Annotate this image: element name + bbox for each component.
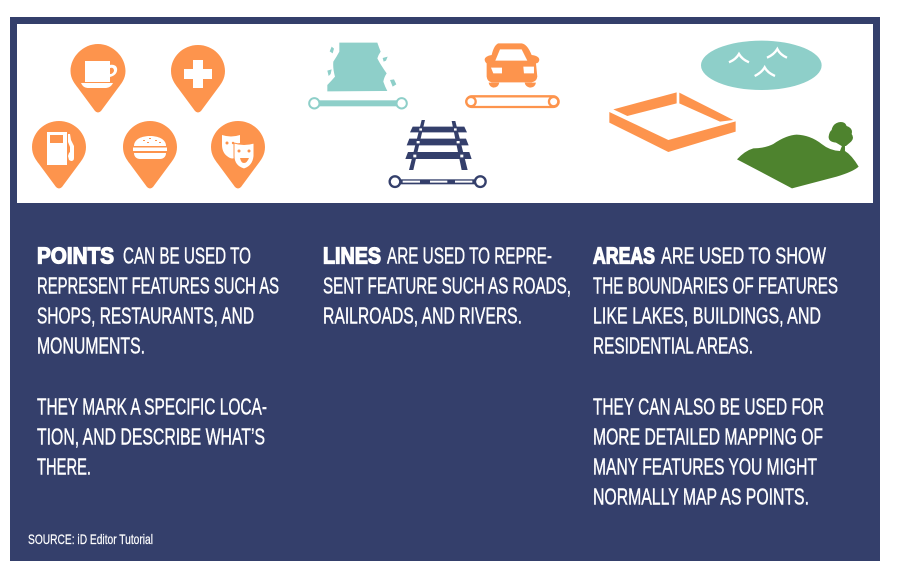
heading: areas: AREAS — [593, 242, 655, 268]
heading: lines: LINES — [323, 242, 381, 268]
icon: burger point marker — [123, 121, 177, 188]
icon: car with road line symbol — [466, 43, 559, 107]
text block: areas description — [593, 242, 838, 510]
icon: medical cross point marker — [171, 45, 225, 112]
text block: points description: MONUMENTS. — [37, 332, 145, 358]
heading: points: POINTS — [37, 242, 114, 268]
text block: points description: REPRESENT FEATURES SUCH AS — [37, 272, 279, 298]
text block: lines description — [323, 242, 571, 328]
text block: points description: THERE. — [37, 454, 91, 480]
icon: green hill with tree area — [737, 122, 859, 188]
icon: building outline area — [609, 92, 736, 152]
text block: areas description: ARE USED TO SHOW — [661, 242, 827, 268]
text block: lines description: ARE USED TO REPRE- — [387, 242, 552, 268]
icon: lake area — [701, 41, 822, 90]
text block: points description: CAN BE USED TO — [123, 242, 251, 268]
text block: points description: SHOPS, RESTAURANTS, AND — [37, 302, 254, 328]
icon: railway with line symbol — [390, 120, 486, 187]
text block: points description: THEY MARK A SPECIFIC LOCA- — [37, 394, 267, 420]
icon: fuel pump point marker — [32, 121, 86, 188]
text block: points description: TION, AND DESCRIBE WHAT’S — [37, 424, 265, 450]
text block: areas description: RESIDENTIAL AREAS. — [593, 332, 753, 358]
source note: SOURCE: iD Editor Tutorial — [28, 531, 153, 547]
icon: theatre masks point marker — [211, 121, 265, 188]
text block: lines description: SENT FEATURE SUCH AS ROADS, — [323, 272, 571, 298]
text block: points description — [37, 242, 279, 480]
icon: coffee point marker — [70, 44, 126, 112]
icon: river with line symbol — [309, 43, 407, 108]
text block: lines description: RAILROADS, AND RIVERS. — [323, 302, 522, 328]
white illustration panel — [17, 24, 873, 203]
